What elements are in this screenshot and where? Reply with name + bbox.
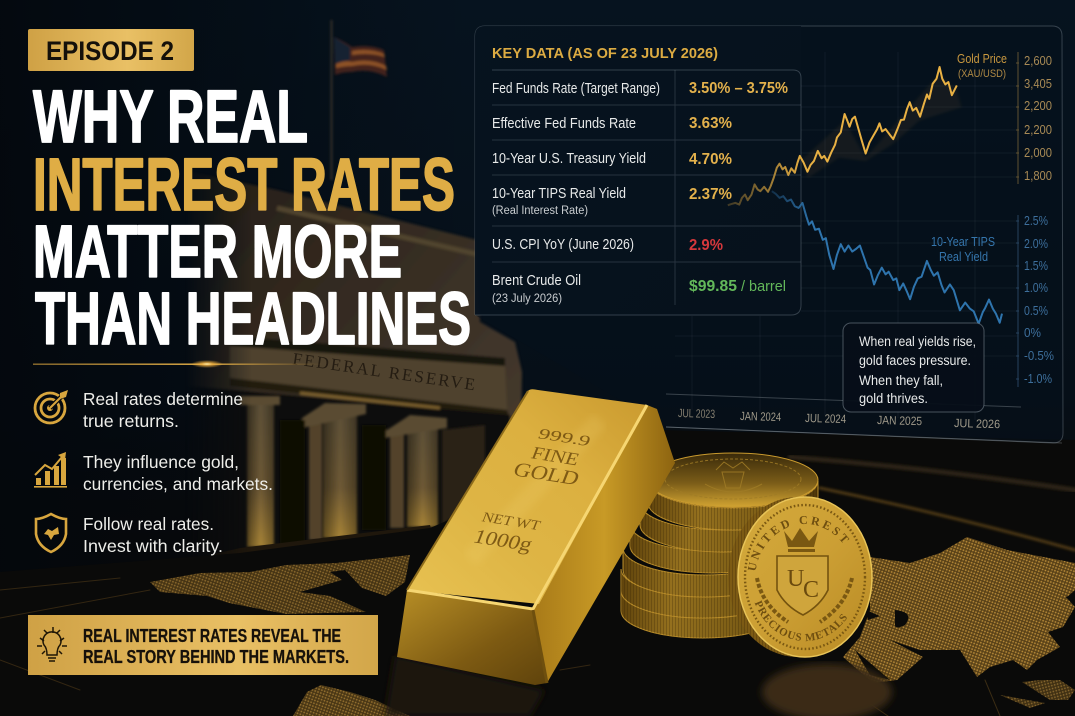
row: fed funds target bbox=[492, 80, 788, 97]
x axis dates bbox=[678, 406, 1001, 431]
gold axis: 3,405 bbox=[1024, 77, 1052, 91]
chart perspective baselines bbox=[666, 394, 1062, 443]
row: brent bbox=[492, 273, 786, 305]
map: americas bbox=[150, 555, 410, 614]
bullet text: clarity: Follow real rates. bbox=[83, 514, 214, 534]
row: cpi: U.S. CPI YoY (June 2026) bbox=[492, 237, 634, 253]
row: tips real yield: (Real Interest Rate) bbox=[492, 205, 588, 217]
chart grid bbox=[675, 52, 1018, 420]
row: cpi: 2.9% bbox=[689, 237, 723, 254]
real yield axis: 1.5% bbox=[1024, 259, 1048, 273]
coin edge bbox=[728, 497, 868, 657]
bar engraving: FINE bbox=[529, 443, 582, 469]
background: darker left side bbox=[0, 0, 470, 716]
title: MATTER MORE bbox=[33, 210, 402, 293]
icon: light bulb bbox=[37, 627, 67, 661]
building body bbox=[198, 176, 524, 464]
callout: When real yields rise, bbox=[859, 334, 976, 349]
background: federal reserve building bbox=[198, 176, 524, 555]
bar end face bbox=[397, 590, 547, 685]
real yield axis: 0.5% bbox=[1024, 304, 1048, 318]
bar top face bbox=[407, 389, 647, 604]
laurels bbox=[757, 578, 852, 622]
label: gold price: Gold Price bbox=[957, 52, 1007, 66]
front coin bbox=[728, 496, 873, 658]
steps bbox=[216, 525, 431, 554]
row: treasury yield: 4.70% bbox=[689, 151, 732, 168]
real yield axis: -0.5% bbox=[1024, 349, 1054, 363]
map: asia landmass bbox=[843, 537, 1075, 683]
bar engraving bbox=[470, 426, 593, 556]
table heading: KEY DATA (AS OF 23 JULY 2026) bbox=[492, 45, 718, 62]
row: brent: Brent Crude Oil bbox=[492, 273, 581, 289]
map: south landmass bbox=[293, 685, 410, 716]
gold axis: 2,200 bbox=[1024, 123, 1052, 137]
real yield axis: 2.0% bbox=[1024, 237, 1048, 251]
shield letters bbox=[787, 566, 819, 603]
callout: gold thrives. bbox=[859, 391, 928, 406]
stacked coin edges bbox=[621, 481, 818, 638]
row: brent: $99.85 bbox=[689, 278, 737, 295]
title bbox=[33, 75, 471, 360]
real yield axis: 1.0% bbox=[1024, 281, 1048, 295]
shield letters: C bbox=[803, 577, 819, 603]
bar engraving: 999.9 bbox=[536, 426, 593, 450]
bar engraving: 1000g bbox=[470, 526, 535, 556]
real yield axis: -1.0% bbox=[1024, 372, 1052, 386]
engraved building name: FEDERAL RESERVE bbox=[291, 349, 476, 394]
bullet text: influence: They influence gold, bbox=[83, 452, 239, 472]
x axis dates: JAN 2025 bbox=[877, 413, 923, 428]
row: effective rate: Effective Fed Funds Rate bbox=[492, 116, 636, 132]
row: brent: / barrel bbox=[741, 279, 786, 295]
bar engraving: NET WT bbox=[480, 510, 543, 534]
panel: key data and chart bbox=[475, 26, 1063, 443]
bullet text: influence bbox=[83, 452, 273, 494]
real yield axis bbox=[1016, 214, 1054, 387]
x axis dates: JUL 2024 bbox=[805, 411, 847, 426]
callout bbox=[843, 323, 984, 412]
icon: target bbox=[35, 390, 68, 423]
bar highlights bbox=[407, 405, 647, 609]
row: treasury yield bbox=[492, 151, 732, 168]
callout: When they fall, bbox=[859, 373, 943, 388]
table bbox=[475, 26, 801, 315]
callout banner bbox=[28, 615, 378, 675]
bullet text: true returns: true returns. bbox=[83, 411, 179, 431]
callout: gold faces pressure. bbox=[859, 353, 971, 368]
row: tips real yield bbox=[492, 186, 732, 217]
icon: shield bbox=[36, 514, 66, 552]
row: tips real yield: 10-Year TIPS Real Yield bbox=[492, 186, 626, 202]
map streaks bbox=[0, 457, 1075, 716]
chart: real yield line bbox=[772, 191, 1002, 324]
x axis dates: JUL 2026 bbox=[954, 416, 1001, 431]
real yield axis: 0% bbox=[1024, 326, 1041, 340]
coin stack bbox=[621, 453, 818, 638]
reflection under gold bar bbox=[385, 655, 545, 716]
gold axis: 2,200 bbox=[1024, 99, 1052, 113]
label: gold price: (XAU/USD) bbox=[958, 68, 1006, 80]
title: WHY REAL bbox=[33, 75, 308, 158]
gold axis bbox=[1016, 52, 1052, 184]
label: gold price bbox=[957, 52, 1007, 80]
coin face bbox=[738, 497, 872, 657]
banner text: REAL STORY BEHIND THE MARKETS. bbox=[83, 647, 349, 667]
row: fed funds target: 3.50% – 3.75% bbox=[689, 80, 788, 97]
episode badge bbox=[28, 29, 194, 71]
banner text: REAL INTEREST RATES REVEAL THE bbox=[83, 626, 341, 646]
gold axis: 2,000 bbox=[1024, 146, 1052, 160]
row: cpi bbox=[492, 237, 723, 254]
background: dark table surface bbox=[0, 430, 1075, 716]
real yield axis: 2.5% bbox=[1024, 214, 1048, 228]
reflection under coins bbox=[762, 664, 892, 716]
chart: gold price line bbox=[728, 67, 961, 205]
episode badge: EPISODE 2 bbox=[46, 36, 174, 66]
map: indonesia islands bbox=[1000, 680, 1075, 708]
panel outline bbox=[475, 26, 1063, 443]
title divider bbox=[33, 360, 323, 368]
bullet text: clarity bbox=[83, 514, 223, 556]
top coin emblem bbox=[665, 459, 801, 499]
map: sea holes bbox=[855, 590, 1075, 680]
columns bbox=[240, 396, 485, 547]
bullet text: true returns: Real rates determine bbox=[83, 389, 243, 409]
top coin face bbox=[648, 453, 818, 507]
coin lettering bbox=[748, 516, 850, 642]
background: american flag on pole bbox=[330, 20, 387, 180]
bar side face bbox=[533, 405, 675, 683]
label: real yield bbox=[931, 234, 995, 264]
banner text bbox=[83, 626, 349, 667]
title: INTEREST RATES bbox=[33, 143, 455, 226]
bullet text: clarity: Invest with clarity. bbox=[83, 536, 223, 556]
icon: growth chart bbox=[34, 452, 67, 488]
title: THAN HEADLINES bbox=[35, 277, 471, 360]
row: fed funds target: Fed Funds Rate (Target Range) bbox=[492, 81, 660, 97]
gold bar bbox=[397, 389, 675, 685]
crown bbox=[784, 528, 818, 552]
shield bbox=[777, 556, 828, 615]
dotted rim bbox=[745, 505, 865, 649]
gold axis: 2,600 bbox=[1024, 54, 1052, 68]
x axis dates: JUL 2023 bbox=[678, 406, 716, 421]
bullet text: influence: currencies, and markets. bbox=[83, 474, 273, 494]
bullet text: true returns bbox=[83, 389, 243, 431]
bar engraving: GOLD bbox=[510, 459, 582, 490]
coin lettering: UNITED CREST bbox=[748, 516, 850, 570]
label: real yield: 10-Year TIPS bbox=[931, 234, 995, 249]
shield letters: U bbox=[787, 566, 804, 592]
gold axis: 1,800 bbox=[1024, 169, 1052, 183]
coin lettering: PRECIOUS METALS bbox=[754, 600, 847, 642]
row: effective rate: 3.63% bbox=[689, 115, 732, 132]
row: brent: (23 July 2026) bbox=[492, 293, 562, 305]
label: real yield: Real Yield bbox=[939, 249, 988, 264]
background: dotted world map bbox=[0, 457, 1075, 716]
row: treasury yield: 10-Year U.S. Treasury Yield bbox=[492, 151, 646, 167]
row: effective rate bbox=[492, 115, 732, 132]
x axis dates: JAN 2024 bbox=[740, 409, 782, 424]
row: tips real yield: 2.37% bbox=[689, 186, 732, 203]
